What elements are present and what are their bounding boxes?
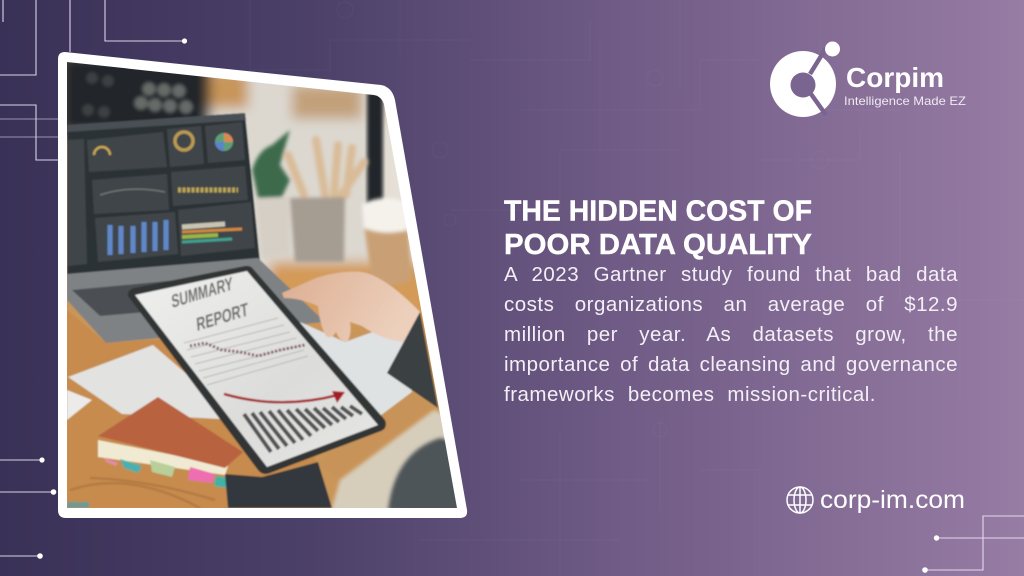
plant, pencil cup and coffee [252, 130, 412, 286]
dashboard panels [68, 122, 255, 266]
logo icon [770, 42, 840, 117]
dark window frame [367, 92, 383, 204]
body paragraph: A 2023 Gartner study found that bad data [504, 263, 958, 286]
logo tagline: Intelligence Made EZ [844, 94, 966, 108]
lower right background [330, 408, 445, 508]
paper sheets [68, 345, 240, 420]
report title on tablet: SUMMARY [171, 273, 234, 312]
wood strip right [380, 396, 408, 416]
circuit lines bottom left [0, 457, 56, 559]
body paragraph [504, 263, 958, 406]
laptop [67, 113, 260, 282]
heading: POOR DATA QUALITY [504, 229, 812, 261]
jacket sleeve [387, 312, 438, 408]
icon: globe [787, 487, 813, 513]
heading: THE HIDDEN COST OF [504, 196, 812, 228]
dark sleeve lower [225, 462, 332, 508]
blurred office background [67, 62, 422, 315]
body paragraph: costs organizations an average of $12.9 [504, 293, 958, 316]
faint circuit pattern [250, 0, 1024, 576]
photo frame [58, 52, 467, 518]
circuit lines bottom right [922, 516, 1024, 573]
website text: corp-im.com [820, 486, 965, 514]
logo [770, 42, 966, 117]
body paragraph: importance of data cleansing and governance [504, 353, 958, 376]
logo wordmark: Corpim [846, 62, 944, 93]
website link [787, 486, 965, 514]
photo: office desk with tablet report: REPORT [196, 299, 249, 335]
heading [504, 196, 812, 261]
shelf dots [82, 72, 193, 118]
desk [67, 310, 320, 508]
body paragraph: frameworks becomes mission-critical. [504, 383, 876, 406]
body paragraph: million per year. As datasets grow, the [504, 323, 958, 346]
hand pointing [282, 272, 420, 342]
notebook [98, 440, 228, 475]
circuit lines top left [0, 0, 187, 160]
photo: office desk with tablet report [60, 55, 470, 515]
tablet [128, 266, 386, 474]
